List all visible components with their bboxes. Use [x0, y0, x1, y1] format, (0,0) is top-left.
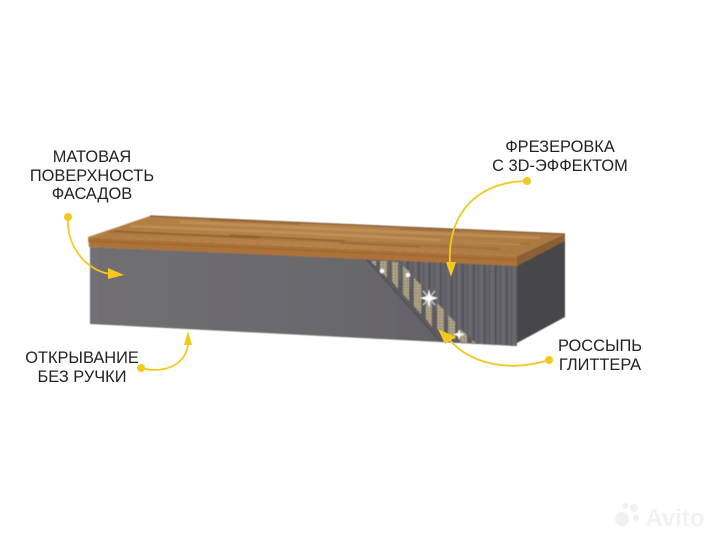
wooden top surface — [88, 216, 565, 256]
label: 3D milling: ФРЕЗЕРОВКА — [505, 138, 615, 156]
label: matte surface: МАТОВАЯ — [53, 148, 131, 166]
band edge — [367, 260, 439, 340]
label: handleless opening: ОТКРЫВАНИЕ — [25, 349, 139, 367]
label: glitter: РОССЫПЬ — [558, 337, 642, 355]
sparkles — [380, 269, 465, 340]
wooden right edge — [517, 234, 565, 266]
glitter strips — [372, 261, 476, 343]
label: handleless opening: БЕЗ РУЧКИ — [37, 368, 127, 386]
wood grain — [110, 216, 565, 249]
arrow: matte surface — [64, 213, 124, 279]
side panel — [517, 240, 565, 343]
label: matte surface: ПОВЕРХНОСТЬ — [30, 167, 154, 185]
watermark: Avito: Avito — [645, 505, 705, 532]
label: glitter: ГЛИТТЕРА — [559, 356, 641, 374]
label: matte surface — [30, 148, 154, 279]
arrow: glitter — [438, 329, 553, 366]
diagonal band — [366, 259, 478, 344]
arrow: handleless opening — [137, 331, 192, 372]
label: handleless opening — [25, 331, 192, 386]
wood edge shading — [88, 241, 517, 260]
watermark: Avito — [615, 503, 705, 532]
arrow: 3D milling — [446, 177, 531, 277]
label: glitter — [438, 329, 642, 374]
label: 3D milling — [446, 138, 628, 277]
front facade — [90, 247, 517, 346]
label: 3D milling: С 3D-ЭФФЕКТОМ — [492, 157, 628, 175]
cabinet — [88, 216, 565, 346]
milled ribbed section — [365, 258, 517, 346]
wooden front edge — [88, 237, 517, 266]
label: matte surface: ФАСАДОВ — [52, 185, 132, 203]
